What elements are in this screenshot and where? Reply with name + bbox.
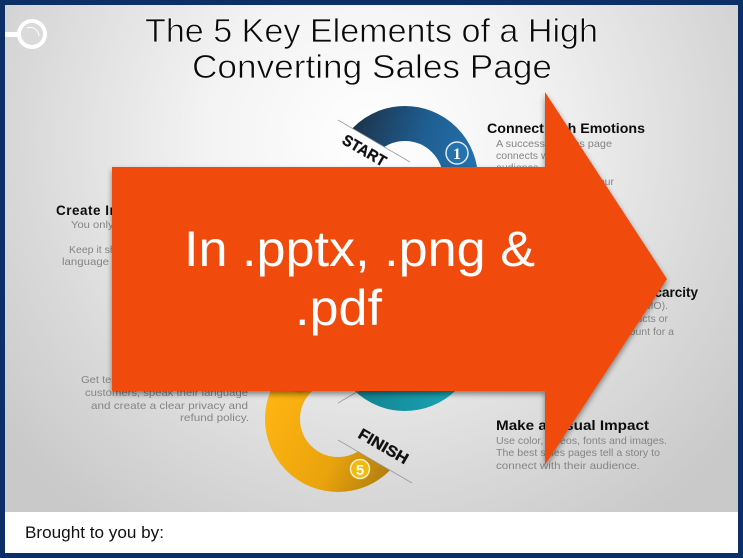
text block: visual impact — [496, 418, 667, 472]
text block: trust — [81, 374, 249, 424]
icon: corner ring — [5, 21, 45, 47]
text block: visual impact: Use color, videos, fonts and images. — [496, 435, 667, 447]
number badge 1: 1 — [453, 146, 461, 163]
number badge 4 — [289, 371, 311, 393]
text block: create interest: language clear — [62, 256, 138, 268]
ring segment 1: blue — [352, 106, 477, 167]
text block: connect with emotions: Connect with Emotions — [487, 121, 645, 136]
number badge 1 — [446, 142, 468, 164]
start divider line — [338, 120, 410, 162]
text block: scarcity: (FOMO). — [627, 300, 668, 312]
text block: visual impact: The best sales pages tell a story to — [496, 447, 660, 459]
text block: scarcity: discount for a — [611, 326, 674, 338]
ring segment 5: gold — [282, 364, 394, 474]
ring segment: teal — [350, 282, 460, 394]
arrow callout: .pdf — [295, 280, 382, 336]
text block: trust: Get testimonials — [81, 374, 161, 386]
text block: trust: customers, speak their language — [85, 387, 248, 399]
middle divider line — [338, 389, 362, 403]
text block: create interest: Keep it short — [69, 244, 128, 256]
text block: connect with emotions: your — [594, 176, 614, 188]
text block: scarcity — [600, 285, 698, 338]
text block: scarcity: Create Scarcity — [600, 285, 698, 300]
text block: scarcity: products or — [615, 313, 668, 325]
text block: visual impact: Make a Visual Impact — [496, 418, 650, 433]
finish divider line — [338, 440, 412, 483]
text block: create interest: Create Interest — [56, 203, 158, 218]
arrow callout — [112, 92, 667, 465]
footer band: Brought to you by: — [25, 523, 164, 542]
title: Converting Sales Page — [192, 48, 552, 85]
text block: trust: and create a clear privacy and — [91, 400, 248, 412]
finish label: FINISH — [355, 426, 411, 468]
text block: connect with emotions: connects with your — [496, 150, 583, 162]
text block: visual impact: connect with their audience. — [496, 460, 640, 472]
text block: connect with emotions: A successful sales page — [496, 138, 612, 150]
start label: START — [339, 132, 390, 171]
number badge 5 — [350, 460, 370, 479]
text block: trust: refund policy. — [180, 412, 249, 424]
number badge 5: 5 — [356, 462, 364, 479]
text block: connect with emotions — [487, 121, 645, 188]
title: The 5 Key Elements of a High — [145, 12, 598, 49]
footer band — [5, 512, 738, 553]
text block: create interest — [56, 203, 158, 268]
title — [145, 12, 598, 85]
arrow callout: In .pptx, .png & — [184, 221, 535, 277]
text block: connect with emotions: audience. — [496, 162, 542, 174]
text block: create interest: You only have — [71, 219, 141, 231]
